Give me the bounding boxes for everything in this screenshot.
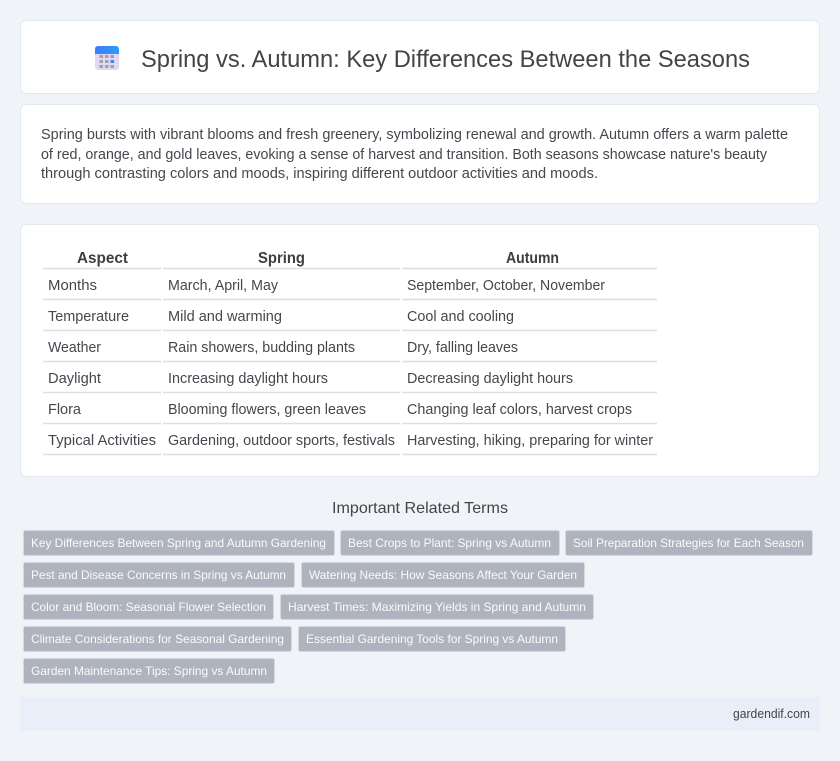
tag xyxy=(298,626,566,652)
row: temperature: Cool and cooling xyxy=(407,309,514,325)
row: daylight: Daylight xyxy=(48,371,101,387)
tag xyxy=(24,658,274,684)
tag: Watering Needs: How Seasons Affect Your Garden xyxy=(309,568,577,582)
row: months xyxy=(48,278,605,294)
row: months: Months xyxy=(48,278,97,294)
row: daylight: Decreasing daylight hours xyxy=(407,371,573,387)
row: flora: Blooming flowers, green leaves xyxy=(168,402,366,418)
tag xyxy=(24,530,334,556)
tag xyxy=(566,530,812,556)
table header xyxy=(77,250,559,267)
tag: Best Crops to Plant: Spring vs Autumn xyxy=(348,536,551,550)
tag: Harvest Times: Maximizing Yields in Spring and Autumn xyxy=(288,600,586,614)
row: weather: Dry, falling leaves xyxy=(407,340,518,356)
intro text: Spring bursts with vibrant blooms and fresh greenery, symbolizing renewal and growth. Autumn offers a warm palette xyxy=(41,127,788,143)
row: temperature: Temperature xyxy=(48,309,129,325)
row: daylight: Increasing daylight hours xyxy=(168,371,328,387)
table header: Aspect xyxy=(77,250,129,267)
intro text xyxy=(41,127,788,182)
related terms heading: Important Related Terms xyxy=(332,500,508,517)
tag: Climate Considerations for Seasonal Gardening xyxy=(31,632,284,646)
row: months: September, October, November xyxy=(407,278,605,294)
row: weather: Weather xyxy=(48,340,101,356)
header panel xyxy=(20,20,820,94)
related term tags xyxy=(24,530,812,684)
row: typical activities: Harvesting, hiking, preparing for winter xyxy=(407,433,653,449)
tag: Garden Maintenance Tips: Spring vs Autumn xyxy=(31,664,267,678)
row: flora: Flora xyxy=(48,402,81,418)
row: typical activities: Gardening, outdoor sports, festivals xyxy=(168,433,395,449)
tag xyxy=(24,562,294,588)
tag: Essential Gardening Tools for Spring vs Autumn xyxy=(306,632,558,646)
intro text: through contrasting colors and moods, inspiring different outdoor activities and moods. xyxy=(41,166,598,182)
row: typical activities xyxy=(48,433,653,449)
footer xyxy=(20,697,820,731)
tag xyxy=(24,626,292,652)
table header: Spring xyxy=(258,250,305,267)
tag xyxy=(280,594,594,620)
intro text: of red, orange, and gold leaves, evoking a sense of harvest and transition. Both seasons showcase nature's beauty xyxy=(41,147,768,163)
row: typical activities: Typical Activities xyxy=(48,433,156,449)
intro panel xyxy=(20,104,820,204)
tag: Color and Bloom: Seasonal Flower Selection xyxy=(31,600,266,614)
row: flora xyxy=(48,402,632,418)
row: months: March, April, May xyxy=(168,278,279,294)
row: daylight xyxy=(48,371,573,387)
row: temperature: Mild and warming xyxy=(168,309,282,325)
row: flora: Changing leaf colors, harvest crops xyxy=(407,402,632,418)
icon: calendar xyxy=(95,46,119,70)
footer credit: gardendif.com xyxy=(733,706,810,721)
tag: Key Differences Between Spring and Autumn Gardening xyxy=(31,536,326,550)
title: Spring vs. Autumn: Key Differences Between the Seasons xyxy=(141,46,750,73)
tag: Pest and Disease Concerns in Spring vs Autumn xyxy=(31,568,286,582)
tag xyxy=(340,530,560,556)
tag xyxy=(302,562,584,588)
comparison table panel xyxy=(20,224,820,476)
row: weather xyxy=(48,340,518,356)
table header: Autumn xyxy=(506,250,559,267)
tag: Soil Preparation Strategies for Each Season xyxy=(573,536,804,550)
tag xyxy=(24,594,274,620)
row: weather: Rain showers, budding plants xyxy=(168,340,355,356)
row: temperature xyxy=(48,309,514,325)
